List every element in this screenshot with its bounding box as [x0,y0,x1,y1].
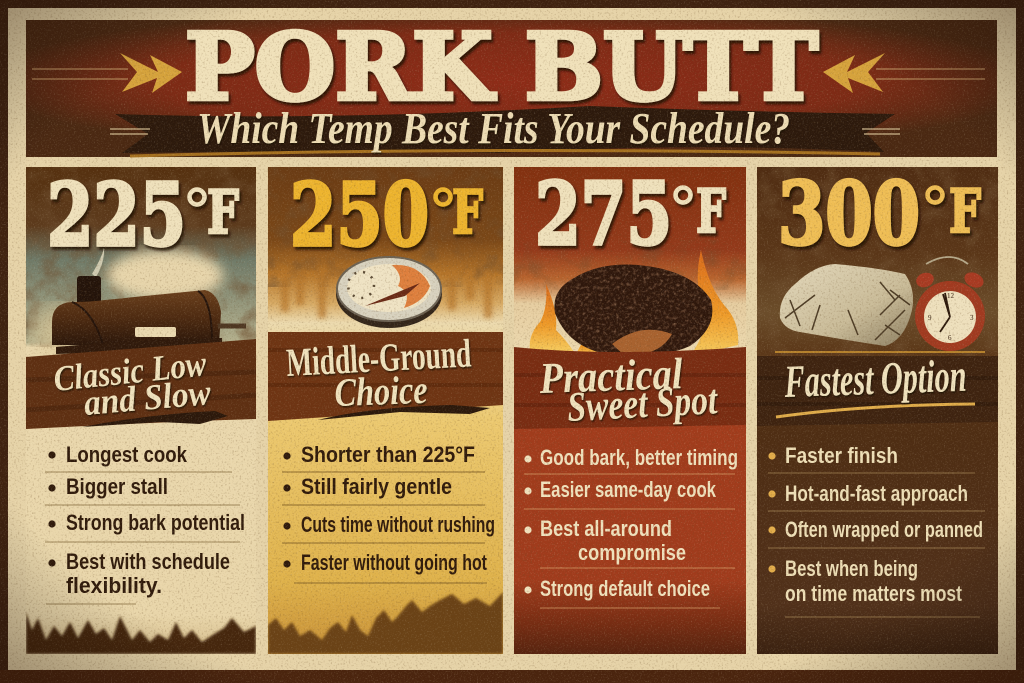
heading: 250°F: 250 [290,165,429,266]
icon: alarm clock [914,257,986,351]
bullet list: 225°F: Longest cook [66,442,188,467]
heading: 250°F [293,178,487,252]
banner title: Choice [334,367,428,415]
subtitle: Which Temp Best Fits Your Schedule? [197,104,790,153]
bullet list: 250°F: Faster without going hot [301,550,487,575]
icon: alarm clock: 12 [947,292,954,300]
bullet list: 225°F: Strong bark potential [66,510,245,535]
panel: 275°F [514,164,746,654]
panel: 300°F [757,164,998,654]
bullet list: 275°F: compromise [578,540,686,565]
heading: 275°F: F [696,177,726,247]
bullet list: 300°F [768,443,985,617]
bullet list: 250°F: Shorter than 225°F [301,442,475,467]
icon: flames [530,250,738,356]
panel: 250°F [268,165,503,654]
banner: 250°F [268,330,503,421]
banner title: Sweet Spot [566,377,719,431]
heading: 225°F: 225 [47,165,186,266]
icon: foil-wrapped pork [780,264,913,346]
icon: alarm clock: 6 [948,334,952,342]
bullet list: 225°F: flexibility. [66,573,162,598]
header panel [26,13,997,157]
bullet list: 250°F: Still fairly gentle [301,474,452,499]
heading: 300°F: 300 [778,164,920,265]
heading: 275°F: 275 [535,164,672,265]
banner title: Middle-Ground [285,330,472,385]
heading: 250°F: F [452,178,483,248]
bullet list: 225°F [45,442,245,604]
panel: 225°F [26,165,256,654]
grunge edge [268,592,503,654]
icon: right arrow [823,53,985,93]
bullet list: 275°F: Best all-around [540,516,672,541]
bullet list: 250°F [282,442,495,583]
icon: left arrow [32,53,182,93]
grunge edge [26,612,256,654]
bullet list: 225°F: Bigger stall [66,474,168,499]
heading: 300°F: F [949,177,981,247]
banner: 225°F [26,339,256,429]
banner title: Classic Low [52,343,209,399]
bullet list: 250°F: Cuts time without rushing [301,512,495,537]
bullet list: 300°F: Hot-and-fast approach [785,481,968,506]
bullet list: 275°F: Strong default choice [540,576,710,601]
bullet list: 300°F: Best when being [785,556,918,581]
banner title [54,356,212,418]
banner title: Practical [538,349,684,403]
bullet list: 300°F: Faster finish [785,443,898,468]
bullet list: 275°F: Good bark, better timing [540,445,738,470]
icon: pork butt [554,264,712,352]
title: PORK BUTT [185,13,818,121]
icon: dial thermometer [336,257,442,328]
heading: 275°F [538,178,730,252]
banner: 300°F [757,350,998,426]
heading: 225°F [50,179,243,253]
bullet list: 225°F: Best with schedule [66,549,230,574]
icon: alarm clock: 9 [928,314,932,322]
icon: alarm clock: 3 [970,314,974,322]
icon: smoker [52,248,246,356]
subtitle ribbon [110,104,900,156]
banner title [540,358,720,427]
banner title [286,338,473,408]
heading: 225°F: F [207,178,239,248]
bullet list: 275°F [524,445,738,608]
bullet list: 300°F: on time matters most [785,581,963,606]
banner title: and Slow [82,372,213,423]
heading: 300°F [781,178,985,252]
banner: 275°F [514,347,746,431]
bullet list: 275°F: Easier same-day cook [540,477,717,502]
